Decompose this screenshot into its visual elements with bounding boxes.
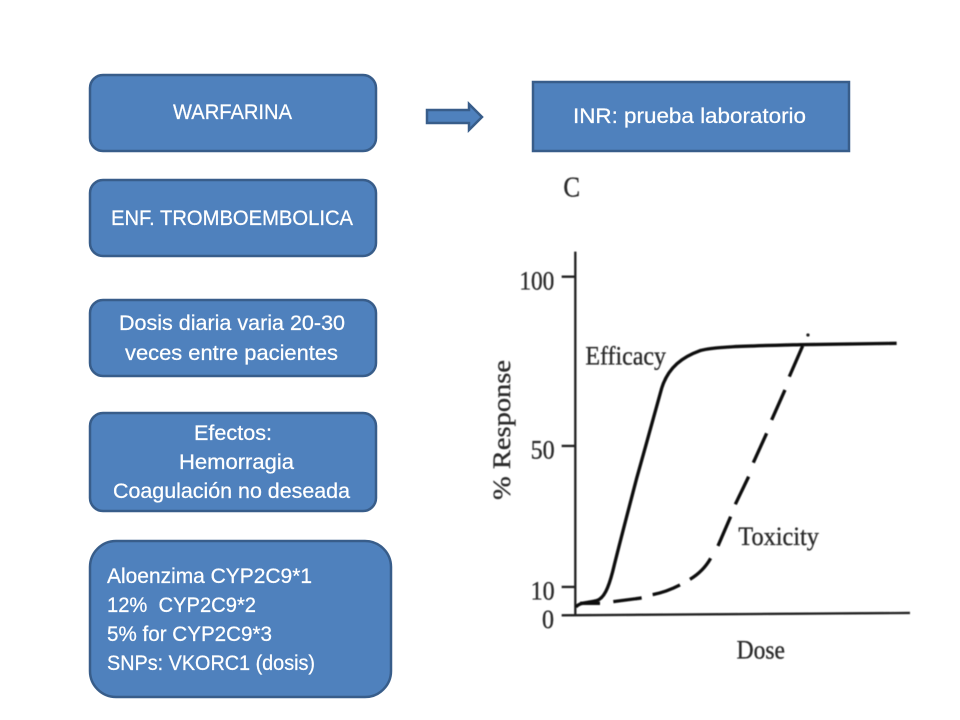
panel letter: C bbox=[563, 173, 580, 204]
box: effects bbox=[90, 413, 376, 511]
y axis numbers: 0 bbox=[542, 604, 554, 634]
box: alloenzymes: 5% for CYP2C9*3 bbox=[107, 623, 272, 646]
toxicity label: Toxicity bbox=[738, 521, 820, 551]
y axis numbers: 10 bbox=[531, 575, 555, 605]
y axis title: % Response bbox=[488, 360, 516, 500]
x axis title: Dose bbox=[737, 634, 785, 664]
box: daily dose bbox=[90, 300, 376, 376]
box: warfarina: WARFARINA bbox=[173, 101, 292, 124]
box: alloenzymes: 12% CYP2C9*2 bbox=[107, 594, 256, 617]
box: daily dose: Dosis diaria varia 20-30 bbox=[119, 312, 345, 335]
efficacy curve bbox=[576, 343, 897, 607]
box: INR test bbox=[533, 82, 849, 151]
toxicity curve bbox=[580, 346, 803, 603]
box: effects: Hemorragia bbox=[179, 451, 294, 474]
y axis numbers: 50 bbox=[531, 435, 555, 465]
efficacy label: Efficacy bbox=[585, 341, 667, 371]
box: alloenzymes bbox=[90, 541, 391, 697]
box: warfarina bbox=[90, 75, 376, 151]
box: effects: Coagulación no deseada bbox=[113, 480, 350, 503]
y axis numbers: 100 bbox=[519, 265, 554, 295]
y axis numbers bbox=[519, 265, 555, 634]
axes bbox=[562, 252, 910, 615]
box: thromboembolic disease bbox=[90, 180, 376, 256]
box: alloenzymes: Aloenzima CYP2C9*1 bbox=[107, 565, 312, 588]
box: thromboembolic disease: ENF. TROMBOEMBOLICA bbox=[111, 207, 353, 230]
box: daily dose: veces entre pacientes bbox=[125, 342, 338, 365]
chart: dose response bbox=[488, 173, 910, 664]
box: INR test: INR: prueba laboratorio bbox=[573, 105, 806, 128]
toxicity end dot bbox=[806, 333, 810, 337]
arrow: warfarina to INR bbox=[427, 104, 482, 130]
box: effects: Efectos: bbox=[194, 422, 272, 445]
box: alloenzymes: SNPs: VKORC1 (dosis) bbox=[107, 652, 315, 675]
